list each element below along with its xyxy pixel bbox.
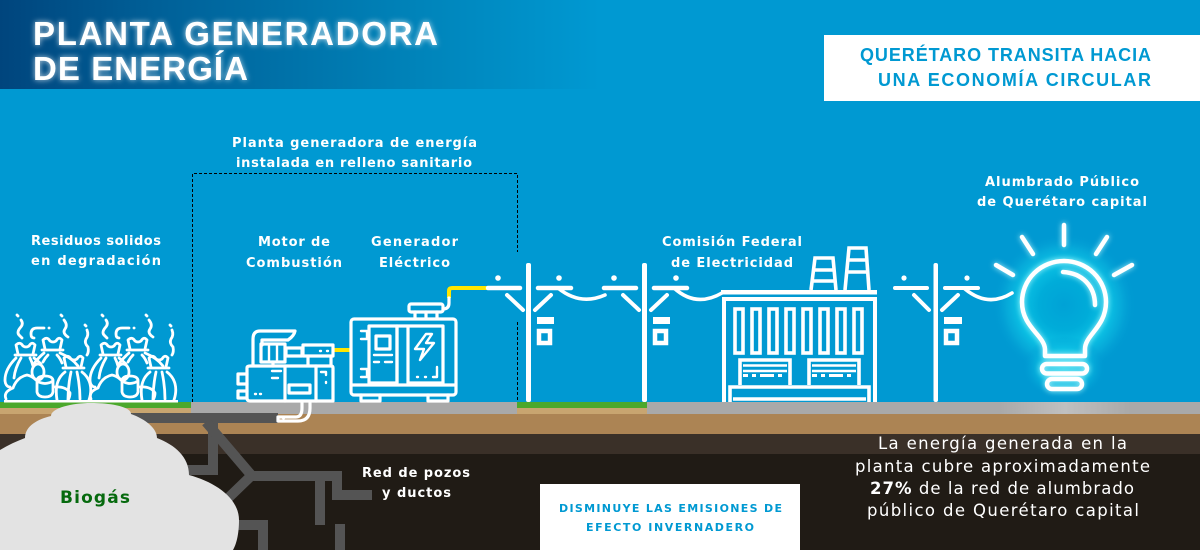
- label: CFE: Comisión Federal: [662, 235, 802, 250]
- label: generator: Generador: [371, 235, 459, 250]
- dashed plant boundary: [192, 174, 518, 402]
- icon: utility pole 3: [895, 263, 978, 402]
- label: waste: [31, 234, 161, 269]
- callout: circular economy: QUERÉTARO TRANSITA HACIA: [860, 44, 1151, 65]
- callout: circular economy: UNA ECONOMÍA CIRCULAR: [878, 69, 1151, 90]
- wire: pole 1 to pole 2: [558, 288, 605, 299]
- text: 27% of public lighting: 27% de la red de alumbrado: [870, 479, 1134, 498]
- icon: utility pole 2: [604, 263, 687, 402]
- icon: electric generator: [351, 298, 456, 401]
- title: [33, 15, 438, 87]
- label: wells: y ductos: [382, 486, 451, 501]
- label: public lighting: de Querétaro capital: [977, 195, 1147, 210]
- glow behind bulb: [992, 233, 1136, 400]
- title: PLANTA GENERADORA: [33, 15, 438, 52]
- icon: combustion motor: [238, 331, 333, 421]
- text: 27% of public lighting: [855, 434, 1150, 520]
- label: plant: instalada en relleno sanitario: [236, 156, 472, 171]
- label: public lighting: [977, 175, 1147, 210]
- text: 27% of public lighting: planta cubre aproximadamente: [855, 457, 1150, 476]
- text: 27% of public lighting: La energía generada en la: [878, 434, 1127, 453]
- header band: [0, 0, 600, 89]
- pipe network: [120, 418, 372, 550]
- text: 27% of public lighting: público de Querétaro capital: [867, 501, 1139, 520]
- icon: waste bags: [4, 315, 178, 402]
- label: Biogás: Biogás: [60, 488, 130, 508]
- label: plant: [232, 136, 477, 171]
- wire: pole 3 to bulb: [965, 289, 1012, 300]
- biogas cloud: [0, 403, 239, 550]
- wire: pole 2 to plant: [674, 288, 722, 299]
- label: public lighting: Alumbrado Público: [985, 175, 1139, 190]
- icon: light bulb: [996, 225, 1132, 389]
- label: wells: Red de pozos: [362, 466, 470, 481]
- label: wells: [362, 466, 470, 501]
- label: waste: Residuos solidos: [31, 234, 161, 249]
- label: CFE: [662, 235, 802, 271]
- label: generator: [371, 235, 459, 271]
- ground layers: [0, 402, 1200, 550]
- icon: CFE power plant: [721, 248, 877, 402]
- callout: circular economy: [824, 35, 1200, 101]
- callout: reduced emissions: EFECTO INVERNADERO: [586, 521, 754, 534]
- label: CFE: de Electricidad: [671, 256, 793, 271]
- label: waste: en degradación: [31, 254, 161, 269]
- background sky: [0, 0, 1200, 402]
- label: motor: Motor de: [258, 235, 330, 250]
- callout: reduced emissions: DISMINUYE LAS EMISIONES DE: [559, 502, 782, 515]
- label: generator: Eléctrico: [379, 256, 450, 271]
- callout: reduced emissions: [540, 484, 800, 550]
- label: motor: [246, 235, 342, 271]
- label: plant: Planta generadora de energía: [232, 136, 477, 151]
- title: DE ENERGÍA: [33, 50, 248, 87]
- label: motor: Combustión: [246, 256, 342, 271]
- icon: utility pole 1: [488, 263, 571, 402]
- yellow cables: [333, 288, 487, 350]
